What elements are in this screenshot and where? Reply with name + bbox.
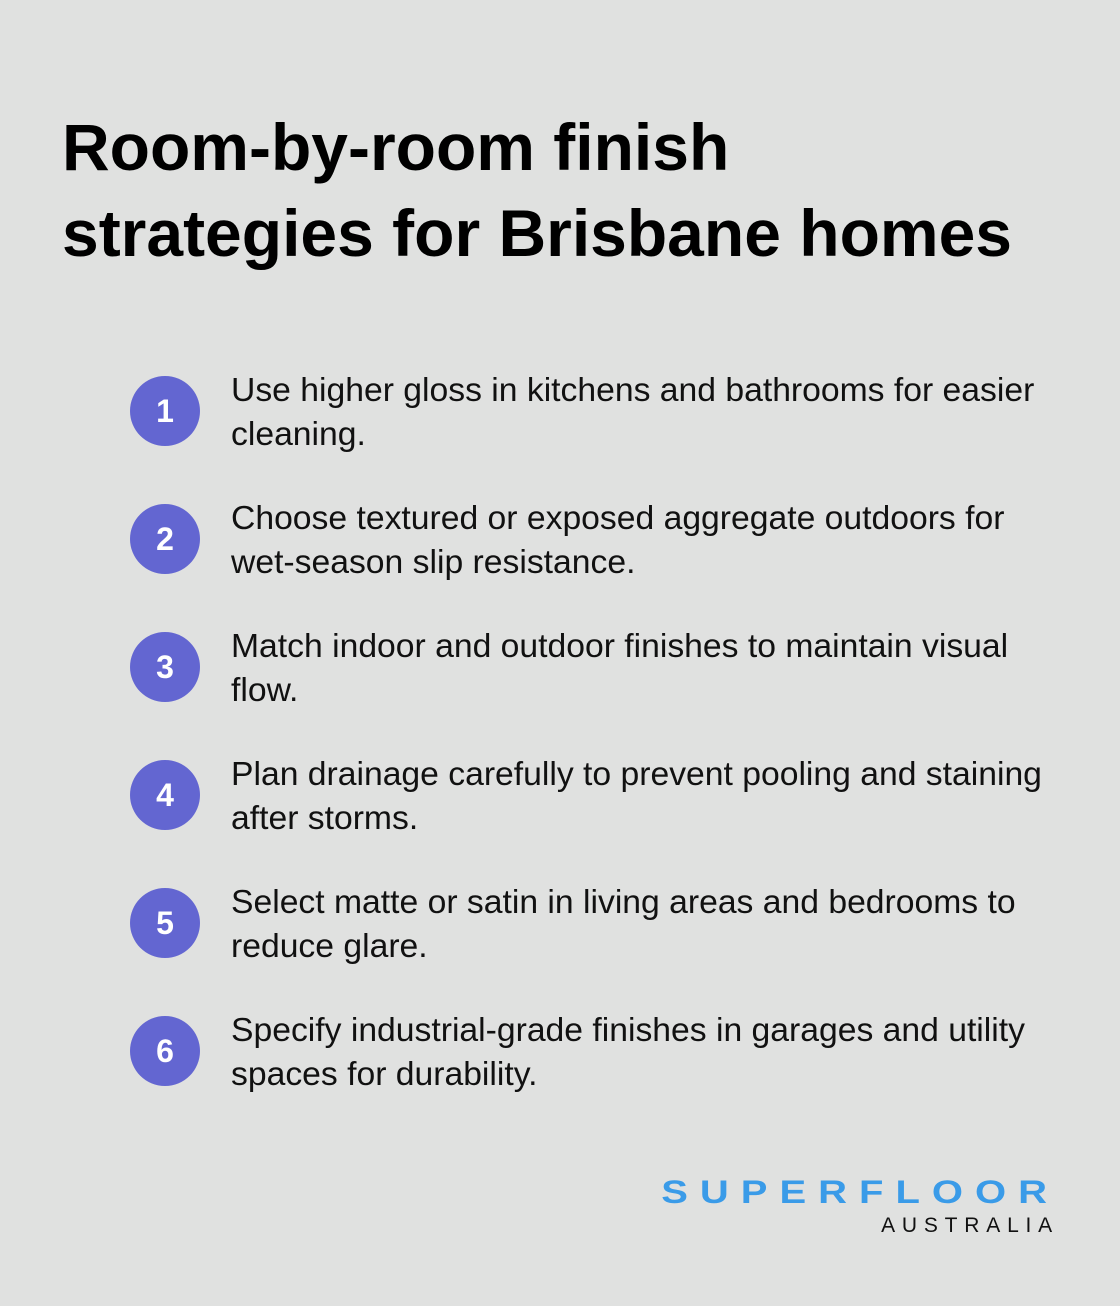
item 6: Specify industrial-grade finishes in garages and utility	[231, 1011, 1025, 1049]
item 3: flow.	[231, 671, 298, 709]
item 5: 5	[156, 905, 174, 941]
logo: SUPERFLOOR	[661, 1174, 1059, 1210]
item 2: Choose textured or exposed aggregate outdoors for	[231, 499, 1004, 537]
title: strategies for Brisbane homes	[62, 196, 1012, 270]
item 4	[130, 755, 1042, 837]
item 5: Select matte or satin in living areas and bedrooms to	[231, 883, 1016, 921]
item 4: after storms.	[231, 799, 418, 837]
item 6: spaces for durability.	[231, 1055, 537, 1093]
item 4: Plan drainage carefully to prevent pooling and staining	[231, 755, 1042, 793]
item 1	[130, 371, 1034, 453]
item 1: cleaning.	[231, 415, 366, 453]
item 1: 1	[156, 393, 174, 429]
item 2: 2	[156, 521, 174, 557]
logo: AUSTRALIA	[881, 1214, 1059, 1237]
item 1: Use higher gloss in kitchens and bathrooms for easier	[231, 371, 1034, 409]
logo	[661, 1174, 1059, 1237]
item 2: wet-season slip resistance.	[231, 543, 635, 581]
title	[62, 110, 1012, 270]
item 3	[130, 627, 1008, 709]
item 4: 4	[156, 777, 174, 813]
item 5	[130, 883, 1016, 965]
item 6	[130, 1011, 1025, 1093]
title: Room-by-room finish	[62, 110, 729, 184]
item 6: 6	[156, 1033, 174, 1069]
item 2	[130, 499, 1004, 581]
item 3: Match indoor and outdoor finishes to maintain visual	[231, 627, 1008, 665]
item 5: reduce glare.	[231, 927, 428, 965]
item 3: 3	[156, 649, 174, 685]
